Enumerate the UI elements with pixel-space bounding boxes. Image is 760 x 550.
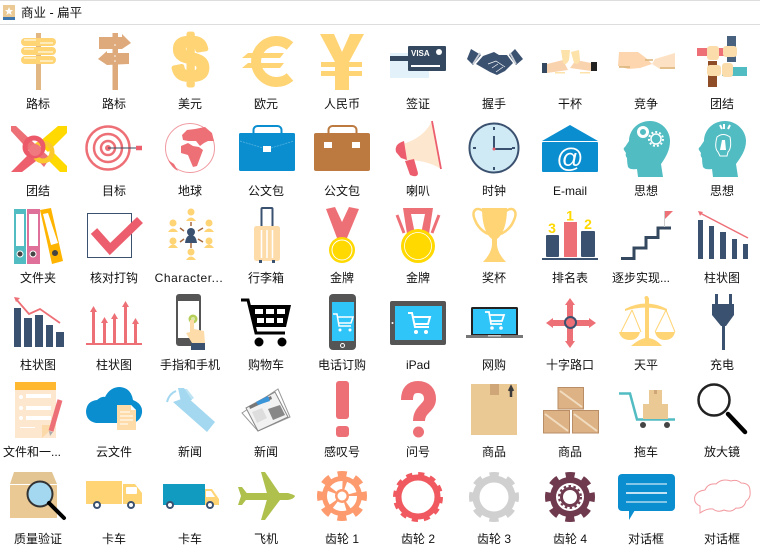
icon: yellow truck (86, 481, 142, 508)
label: 齿轮 3 (477, 532, 511, 546)
icon: luggage (254, 208, 280, 263)
label: 购物车 (248, 357, 284, 372)
label: 对话框 (704, 532, 740, 546)
label: 十字路口 (546, 357, 594, 372)
icon: finger and phone (176, 294, 205, 350)
icon: rolled newspaper (167, 388, 215, 432)
icon: signpost 1 (21, 33, 56, 90)
icon: checkbox (88, 214, 140, 258)
label: 对话框 (628, 532, 664, 546)
icon: four hands unity (697, 36, 747, 87)
icon: airplane (238, 472, 295, 520)
label: 放大镜 (704, 444, 740, 459)
icon: black shopping cart (241, 300, 291, 346)
icon: people network (168, 208, 214, 260)
icon: yuan (320, 34, 364, 90)
label: 感叹号 (324, 444, 360, 459)
label: 签证 (406, 96, 430, 111)
label: 人民币 (324, 97, 360, 111)
label: 齿轮 1 (325, 532, 359, 546)
icon: stairs with flag (621, 211, 673, 258)
label: 新闻 (178, 444, 202, 459)
icon: document and pencil (15, 382, 60, 438)
icon: speech bubble (618, 474, 675, 520)
label: 思想 (710, 183, 734, 198)
label: 核对打钩 (90, 271, 138, 285)
icon: phone order (329, 294, 356, 350)
icon: e-mail envelope: @ (556, 143, 584, 173)
icon: blue truck (163, 484, 219, 508)
icon: bar chart with line (14, 297, 64, 347)
label: 充电 (710, 357, 734, 372)
icon: euro (242, 41, 290, 82)
icon: question mark (407, 387, 430, 438)
icon: magnifier (698, 384, 745, 432)
label: Character... (155, 271, 223, 285)
icon: ranking podium: 1 (566, 208, 574, 224)
title bar icon (3, 5, 15, 20)
label: 质量验证 (14, 531, 62, 546)
icon: visa card (390, 46, 446, 78)
icon: cardboard box (471, 384, 517, 435)
label: 逐步实现... (612, 270, 670, 285)
label: 柱状图 (704, 270, 740, 285)
icon: cloud speech bubble (695, 480, 750, 513)
label: 竞争 (634, 97, 658, 111)
label: 齿轮 4 (553, 532, 587, 546)
icon: handshake (467, 49, 523, 75)
label: 网购 (482, 357, 506, 372)
label: iPad (406, 358, 430, 372)
icon: newspaper (242, 389, 290, 431)
label: 柱状图 (96, 357, 132, 372)
label: 金牌 (330, 270, 354, 285)
icon: competition hands (618, 52, 675, 69)
label: 团结 (710, 97, 734, 111)
label: 欧元 (254, 97, 278, 111)
label: 路标 (26, 96, 50, 111)
label: 公文包 (324, 183, 360, 198)
label: 天平 (634, 358, 658, 372)
icon: gear 2 (396, 474, 440, 520)
icon: exclamation mark (336, 381, 349, 437)
label: 握手 (482, 96, 506, 111)
icon: arrow bar chart (86, 301, 142, 345)
icon: binders (14, 208, 63, 264)
icon: medal 1 (326, 207, 359, 263)
label: 问号 (406, 445, 430, 459)
label: 思想 (634, 183, 658, 198)
icon: bar chart down arrow (698, 211, 748, 259)
icon: gear 4 (548, 475, 592, 519)
icon: hand cart (619, 390, 675, 428)
icon: gear 3 (472, 475, 516, 519)
icon: cloud file (86, 387, 142, 430)
label: 奖杯 (482, 271, 506, 285)
label: 卡车 (102, 531, 126, 546)
icon: megaphone (396, 121, 441, 176)
icon: trophy (474, 208, 515, 262)
label: 云文件 (96, 444, 132, 459)
label: 团结 (26, 184, 50, 198)
label: 美元 (178, 97, 202, 111)
icon: globe (166, 124, 214, 172)
title: 商业 - 扁平 (21, 5, 82, 20)
label: 商品 (482, 444, 506, 459)
label: 飞机 (254, 532, 278, 546)
icon: blue briefcase (239, 126, 295, 171)
label: 路标 (102, 96, 126, 111)
icon: iPad (390, 301, 446, 345)
icon: unity knot (11, 126, 67, 172)
label: 齿轮 2 (401, 532, 435, 546)
icon: target (86, 126, 142, 170)
label: 时钟 (482, 183, 506, 198)
icon: dollar: $ (173, 26, 208, 94)
label: 柱状图 (20, 357, 56, 372)
label: 金牌 (406, 270, 430, 285)
icon: e-mail envelope (542, 125, 598, 173)
icon: gear 1 (320, 474, 364, 518)
label: 卡车 (178, 531, 202, 546)
label: 拖车 (634, 444, 658, 459)
label: 商品 (558, 444, 582, 459)
label: 公文包 (248, 183, 284, 198)
icon: ranking podium (542, 208, 598, 260)
icon: visa card: VISA (411, 49, 430, 58)
icon: brown briefcase (314, 126, 370, 171)
icon: plug (712, 294, 734, 350)
label: 电话订购 (318, 357, 366, 372)
icon: ranking podium: 2 (584, 216, 592, 232)
icon: head with bulb (699, 121, 746, 177)
icon: wooden crates (544, 388, 598, 433)
icon: ranking podium: 3 (548, 220, 556, 236)
label: 行李箱 (248, 270, 284, 285)
icon: head with gears (624, 121, 670, 177)
label: 喇叭 (406, 183, 430, 198)
icon: clock (470, 124, 518, 172)
icon: medal 2 (397, 208, 439, 263)
label: 文件和一... (3, 444, 61, 459)
icon: signpost 2 (98, 33, 131, 90)
label: 手指和手机 (160, 357, 220, 372)
icon: box with magnifier (10, 472, 64, 518)
label: 新闻 (254, 444, 278, 459)
icon: laptop (466, 307, 523, 338)
label: 干杯 (558, 97, 582, 111)
label: E-mail (553, 184, 587, 198)
label: 排名表 (552, 270, 588, 285)
label: 文件夹 (20, 270, 56, 285)
icon: crossroads arrows (546, 298, 596, 348)
label: 目标 (102, 184, 126, 198)
icon: toast (542, 50, 597, 74)
icon: balance scale (619, 296, 675, 346)
label: 地球 (178, 184, 202, 198)
